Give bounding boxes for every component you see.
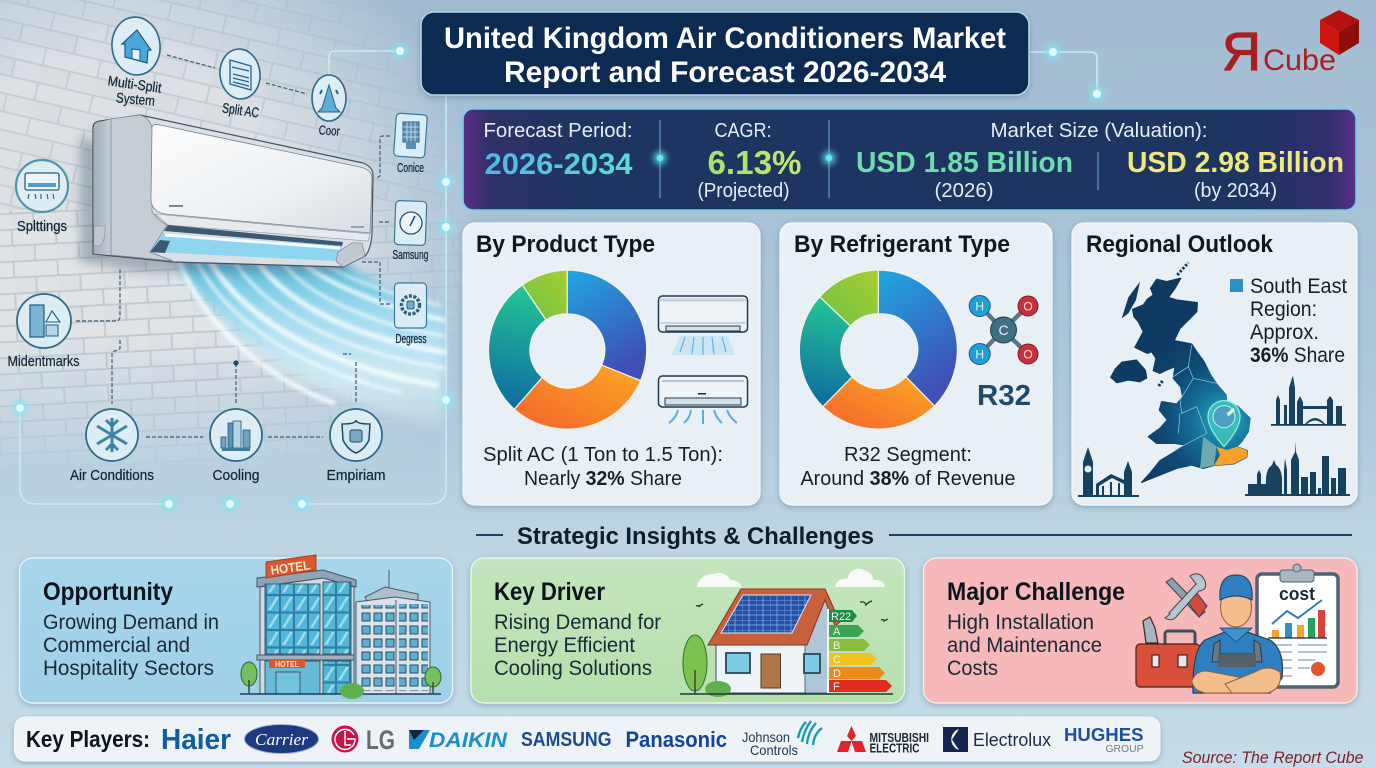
logo: johnson controls xyxy=(742,721,822,758)
label: splittings: Splttings xyxy=(17,218,67,235)
illustration: hotel buildings xyxy=(240,555,441,699)
illustration: cost clipboard xyxy=(1257,564,1338,687)
logo: carrier xyxy=(244,724,318,754)
icon: r32 molecule: H xyxy=(975,300,984,314)
label: multi-split system: Multi-Split xyxy=(107,72,163,96)
marker: south east pin xyxy=(1208,401,1240,447)
caption: refrigerant share: Around 38% of Revenue xyxy=(800,468,1016,490)
stat: market size: (2026) xyxy=(934,180,994,202)
label: samsung: Samsung xyxy=(392,248,429,262)
heading: by product type: By Product Type xyxy=(476,231,655,258)
logo: RCube xyxy=(1222,10,1359,82)
caption: product share xyxy=(483,444,723,490)
illustration: crossed tools xyxy=(1165,574,1207,620)
title banner: United Kingdom Air Conditioners Market xyxy=(444,22,1006,55)
label: coor: Coor xyxy=(318,122,341,139)
legend: south east share xyxy=(1230,275,1347,367)
card text: key driver: Rising Demand for xyxy=(494,611,661,634)
card text: opportunity: Growing Demand in xyxy=(43,611,219,634)
logo: samsung: SAMSUNG xyxy=(521,729,612,751)
stat: cagr xyxy=(698,120,802,202)
connector frame with glowing nodes xyxy=(13,44,1104,511)
label: r32: R32 xyxy=(977,380,1031,412)
logo: lg: LG xyxy=(366,725,395,755)
card text: major challenge: Costs xyxy=(947,657,998,680)
illustration: big ben and bridge xyxy=(1078,447,1139,497)
card text: opportunity xyxy=(43,578,219,680)
icon: split ac xyxy=(217,47,263,121)
stat: market size: (by 2034) xyxy=(1194,180,1277,202)
stat: cagr: CAGR: xyxy=(714,120,772,142)
illustration: cost clipboard: cost xyxy=(1279,584,1315,604)
stat: market size: USD 1.85 Billion xyxy=(856,147,1073,179)
icon: degress gear xyxy=(394,283,426,346)
logo: panasonic: Panasonic xyxy=(626,727,727,752)
icon: r32 molecule xyxy=(969,296,1038,364)
icon: r32 molecule: O xyxy=(1023,300,1033,314)
card text: key driver: Cooling Solutions xyxy=(494,657,652,680)
illustration: tower bridge skyline xyxy=(1271,376,1346,426)
sign: hotel entrance xyxy=(269,659,305,669)
label: empiriam: Empiriam xyxy=(326,467,386,484)
stat: market size: USD 2.98 Billion xyxy=(1127,147,1344,179)
icon: samsung gauge xyxy=(392,200,429,262)
icon: wall ac with airflow xyxy=(658,296,748,355)
heading: regional outlook: Regional Outlook xyxy=(1086,231,1274,258)
logo: mitsubishi electric: MITSUBISHI xyxy=(870,731,929,745)
card: key driver xyxy=(471,558,904,703)
logo: hughes group: HUGHES xyxy=(1064,725,1144,745)
card text: major challenge: High Installation xyxy=(947,611,1094,634)
sign: hotel roof: HOTEL xyxy=(270,557,311,578)
card: opportunity xyxy=(20,555,452,703)
card text: major challenge xyxy=(947,578,1125,680)
logo: haier: Haier xyxy=(161,724,231,756)
icon: multi-split system xyxy=(107,15,163,109)
logo: RCube: Я xyxy=(1222,22,1261,82)
energy rating arrows xyxy=(827,609,892,693)
icon: r32 molecule: O xyxy=(1023,348,1033,362)
icon: splittings xyxy=(16,160,68,235)
icon: ac unit with cold vents xyxy=(658,376,748,424)
icon: conice xyxy=(394,113,427,175)
logo: electrolux: Electrolux xyxy=(973,729,1052,750)
icon: cooling xyxy=(210,409,262,484)
label: key players: Key Players: xyxy=(26,726,150,752)
logo: daikin: DAIKIN xyxy=(429,729,508,752)
icon: coor xyxy=(312,75,346,139)
energy rating arrows: F xyxy=(833,681,840,693)
stat: forecast period xyxy=(484,120,633,181)
label: air conditions: Air Conditions xyxy=(70,467,154,484)
logo: johnson controls: Johnson xyxy=(742,729,790,745)
sign: hotel entrance: HOTEL xyxy=(275,660,299,669)
illustration: toolbox xyxy=(1136,617,1200,687)
label: split ac: Split AC xyxy=(221,100,260,121)
stat: forecast period: Forecast Period: xyxy=(484,120,632,142)
dot on cooling link xyxy=(233,360,239,366)
air conditioner wall unit xyxy=(80,115,373,272)
logo: hughes group: GROUP xyxy=(1106,743,1144,755)
card text: major challenge: and Maintenance xyxy=(947,634,1102,657)
label: degress: Degress xyxy=(396,332,426,346)
energy rating arrows: D xyxy=(833,668,841,680)
heading: by refrigerant type: By Refrigerant Type xyxy=(794,231,1010,258)
map: united kingdom xyxy=(1110,263,1250,482)
brick wall background xyxy=(0,0,459,458)
icon: midentmarks xyxy=(8,294,80,370)
stat: cagr: (Projected) xyxy=(698,180,790,202)
panel: by product type xyxy=(463,223,760,505)
logo: RCube: Cube xyxy=(1263,44,1336,77)
energy rating arrows: R22 xyxy=(831,611,851,623)
key stats bar xyxy=(463,109,1356,210)
caption: refrigerant share xyxy=(800,444,1016,490)
title banner: Report and Forecast 2026-2034 xyxy=(504,56,946,89)
logo: mitsubishi electric xyxy=(837,726,929,756)
panel: by refrigerant type xyxy=(780,223,1052,505)
icon: empiriam shield xyxy=(326,409,386,484)
icon: air conditions snowflake xyxy=(70,409,154,484)
stat: cagr: 6.13% xyxy=(708,144,802,181)
card: major challenge xyxy=(924,558,1357,703)
card text: key driver: Energy Efficient xyxy=(494,634,635,657)
icon: r32 molecule: C xyxy=(998,322,1009,338)
stat: market size: Market Size (Valuation): xyxy=(990,120,1208,142)
card text: key driver: Key Driver xyxy=(494,578,605,606)
card text: major challenge: Major Challenge xyxy=(947,578,1125,606)
key players bar xyxy=(14,717,1160,761)
logo: mitsubishi electric: ELECTRIC xyxy=(870,742,920,756)
label: midentmarks: Midentmarks xyxy=(8,353,80,370)
source note: Source: The Report Cube xyxy=(1182,748,1364,767)
donut chart: product type xyxy=(488,270,647,429)
dashed link lines between icons xyxy=(76,55,391,437)
icon: r32 molecule: H xyxy=(975,348,984,362)
logo: electrolux xyxy=(943,727,1052,752)
logo: hughes group xyxy=(1064,725,1144,755)
card text: key driver xyxy=(494,578,661,680)
label: conice: Conice xyxy=(397,161,424,175)
label: cooling: Cooling xyxy=(212,467,260,484)
illustration: solar house with energy label xyxy=(680,569,893,697)
logo: johnson controls: Controls xyxy=(750,742,798,758)
caption: product share: Nearly 32% Share xyxy=(524,468,682,490)
caption: product share: Split AC (1 Ton to 1.5 Ton): xyxy=(483,444,723,466)
section heading: strategic insights: Strategic Insights & Challenges xyxy=(517,523,874,550)
card text: opportunity: Commercial and xyxy=(43,634,190,657)
legend: south east share: 36% Share xyxy=(1250,344,1345,367)
caption: refrigerant share: R32 Segment: xyxy=(844,444,972,466)
label: multi-split system: System xyxy=(115,89,156,109)
energy rating arrows: C xyxy=(833,654,841,666)
legend: south east share: South East xyxy=(1250,275,1347,298)
label: multi-split system xyxy=(107,72,163,109)
logo: carrier: Carrier xyxy=(255,730,308,749)
cold air flow xyxy=(172,255,444,425)
illustration: technician xyxy=(1192,575,1282,693)
donut chart: refrigerant type xyxy=(799,270,957,429)
legend: south east share: Approx. xyxy=(1250,321,1319,344)
title banner xyxy=(421,12,1029,95)
legend: south east share: Region: xyxy=(1250,298,1317,321)
illustration: city skyline xyxy=(1245,442,1350,496)
stat: market size xyxy=(856,120,1344,202)
card text: opportunity: Opportunity xyxy=(43,578,173,606)
panel: regional outlook xyxy=(1072,223,1357,505)
energy rating arrows: A xyxy=(833,626,841,638)
logo: lg xyxy=(332,725,395,755)
card text: opportunity: Hospitality Sectors xyxy=(43,657,214,680)
energy rating arrows: B xyxy=(833,640,840,652)
stat: forecast period: 2026-2034 xyxy=(484,148,633,181)
